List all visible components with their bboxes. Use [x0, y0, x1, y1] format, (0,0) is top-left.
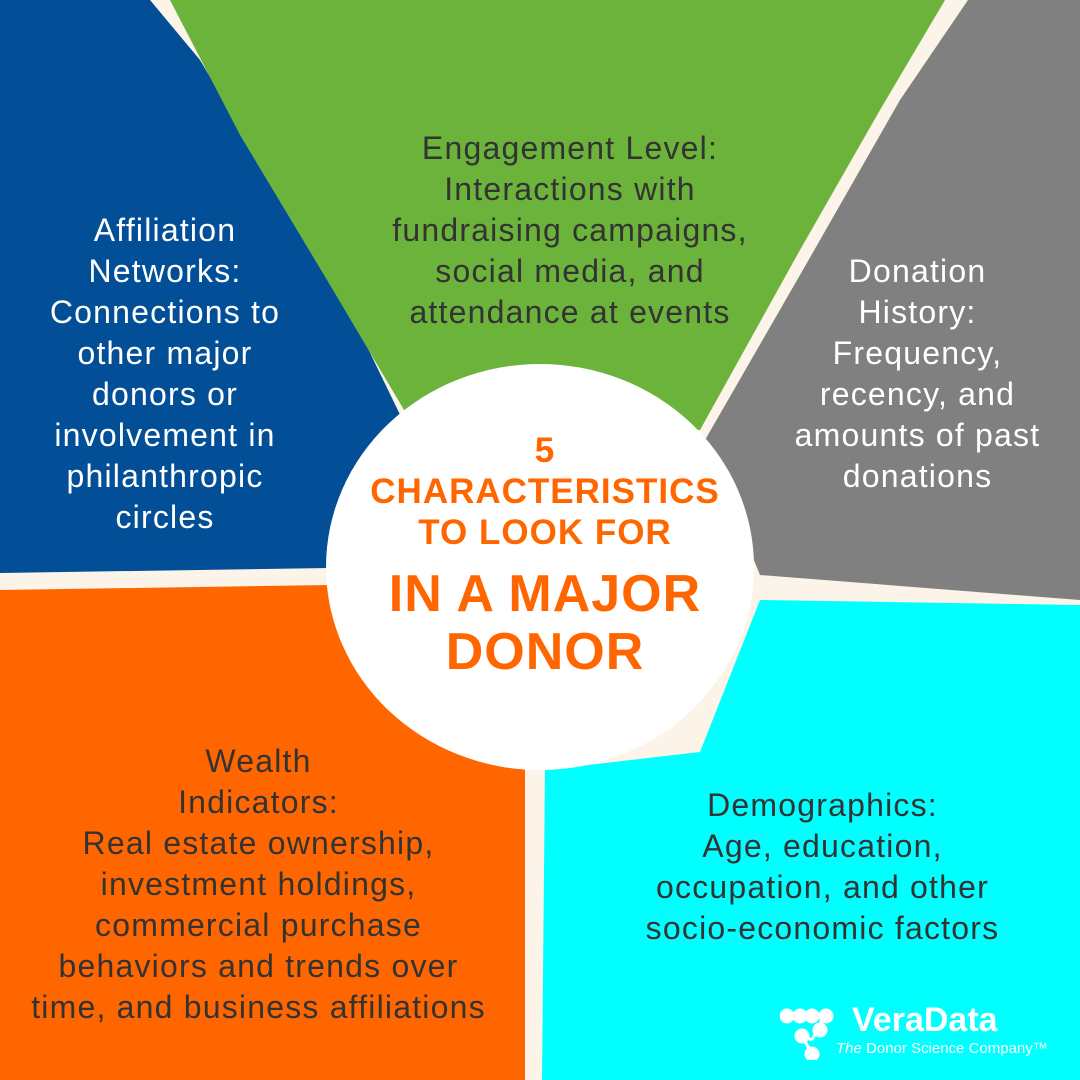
title: CHARACTERISTICS: [370, 472, 720, 511]
text: wealth indicators: [31, 743, 486, 1025]
panel: wealth indicators (orange): [0, 585, 525, 1080]
title: TO LOOK FOR: [418, 513, 672, 552]
title: [370, 431, 720, 681]
text: wealth indicators: time, and business affiliations: [31, 989, 486, 1025]
panel: engagement level (green): [170, 0, 945, 430]
panel: demographics (cyan): [542, 600, 1080, 1080]
logo: VeraData: The Donor Science Company™: [836, 1040, 1048, 1057]
text: demographics: occupation, and other: [656, 869, 989, 905]
text: demographics: Age, education,: [702, 828, 943, 864]
center circle: [326, 364, 754, 770]
text: donation history: [795, 253, 1040, 494]
text: engagement level: [392, 130, 748, 330]
text: donation history: donations: [843, 458, 992, 494]
text: affiliation networks: Networks:: [88, 253, 242, 289]
text: wealth indicators: Indicators:: [178, 784, 339, 820]
text: donation history: Donation: [849, 253, 986, 289]
panel: affiliation networks (blue): [0, 0, 405, 573]
title: IN A MAJOR: [389, 565, 701, 623]
text: donation history: Frequency,: [833, 335, 1002, 371]
text: demographics: Demographics:: [707, 787, 938, 823]
text: donation history: History:: [858, 294, 977, 330]
text: affiliation networks: Affiliation: [94, 212, 236, 248]
text: wealth indicators: Wealth: [205, 743, 312, 779]
text: wealth indicators: behaviors and trends over: [58, 948, 458, 984]
text: affiliation networks: Connections to: [50, 294, 280, 330]
text: donation history: recency, and: [820, 376, 1015, 412]
text: affiliation networks: philanthropic: [66, 458, 264, 494]
text: demographics: socio-economic factors: [646, 910, 999, 946]
title: DONOR: [446, 623, 644, 681]
text: affiliation networks: other major: [77, 335, 253, 371]
text: engagement level: Engagement Level:: [422, 130, 718, 166]
logo: VeraData: VeraData: [852, 1001, 998, 1039]
text: demographics: [646, 787, 999, 946]
title: 5: [535, 431, 555, 470]
logo: VeraData: [780, 1001, 1048, 1060]
text: engagement level: social media, and: [435, 253, 705, 289]
text: wealth indicators: investment holdings,: [101, 866, 416, 902]
panel: donation history (gray): [705, 0, 1080, 600]
text: affiliation networks: circles: [115, 499, 215, 535]
text: affiliation networks: donors or: [92, 376, 238, 412]
text: wealth indicators: Real estate ownership,: [83, 825, 434, 861]
text: engagement level: attendance at events: [409, 294, 731, 330]
text: affiliation networks: [50, 212, 280, 535]
text: engagement level: fundraising campaigns,: [392, 212, 748, 248]
text: affiliation networks: involvement in: [54, 417, 276, 453]
text: donation history: amounts of past: [795, 417, 1040, 453]
text: engagement level: Interactions with: [444, 171, 696, 207]
text: wealth indicators: commercial purchase: [95, 907, 422, 943]
